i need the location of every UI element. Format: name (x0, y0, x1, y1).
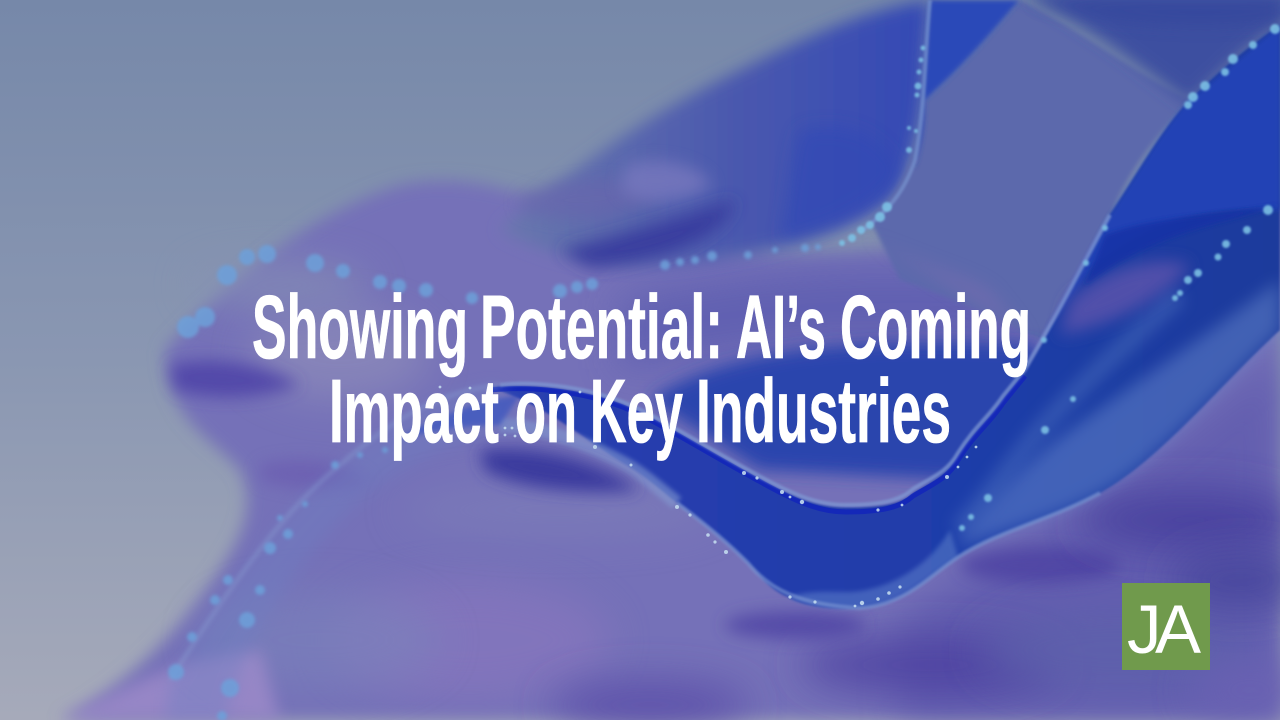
inner channel pale strip (500, 215, 1110, 505)
title: Impact (329, 362, 499, 462)
title: AI’s (736, 278, 826, 378)
title: Industries (696, 362, 951, 462)
title: Key (590, 362, 683, 462)
droplets: blurred blue (168, 244, 821, 720)
upper fold (500, 0, 930, 266)
lower purple mass (60, 181, 1280, 720)
droplets: small pale (439, 386, 977, 607)
ribbon edge highlights (677, 493, 1100, 608)
top right dark band (1015, 0, 1280, 105)
logo: JA green square: JA (1127, 591, 1201, 668)
title: on (515, 362, 577, 462)
pale translucent band along ribbon lower right (955, 280, 1280, 550)
inner channel dark line (489, 376, 1025, 512)
central grey-purple panel (870, 0, 1190, 340)
left tail (165, 385, 520, 720)
upper fold blue strip (915, 0, 1020, 170)
droplets: cyan highlights (839, 24, 1280, 531)
title: Potential: (480, 278, 723, 378)
title: Showing (252, 278, 468, 378)
dark shadow beneath channel (480, 449, 640, 492)
main blue ribbon (489, 25, 1280, 608)
area above inner channel (650, 342, 1040, 480)
lighter gray strip within left purple (250, 310, 430, 400)
purple reflection on right ribbon (1060, 261, 1190, 335)
title: Coming (840, 278, 1031, 378)
title (252, 278, 1031, 462)
darker purple patches (170, 361, 300, 397)
lower right shading (900, 350, 1280, 720)
purple band above centre (620, 270, 1040, 370)
dark streak (1085, 205, 1280, 285)
